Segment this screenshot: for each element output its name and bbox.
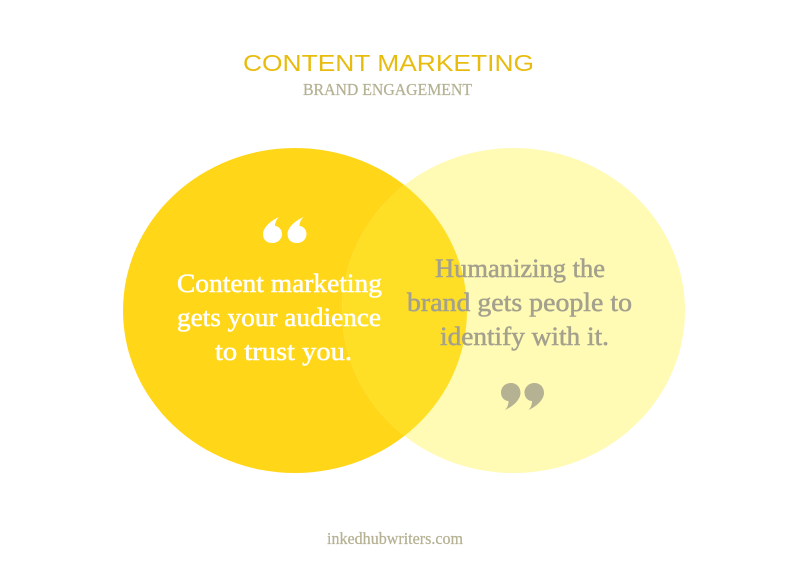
- circle: left: [123, 148, 467, 473]
- icon: opening quotation mark: [263, 217, 306, 243]
- title: CONTENT MARKETING: [243, 50, 534, 76]
- icon: closing quotation mark: [501, 383, 544, 410]
- venn diagram: [123, 148, 685, 473]
- text block: right circle: identify with it.: [440, 322, 609, 351]
- text block: right circle: brand gets people to: [407, 288, 632, 317]
- text block: left circle: to trust you.: [215, 337, 352, 366]
- circle: right: [342, 148, 685, 473]
- subtitle: BRAND ENGAGEMENT: [303, 80, 473, 99]
- overlap region: [342, 185, 467, 436]
- text block: left circle: Content marketing: [177, 269, 382, 298]
- footer website: inkedhubwriters.com: [327, 529, 463, 548]
- text block: left circle: gets your audience: [177, 303, 381, 332]
- infographic canvas: [123, 55, 685, 544]
- text block: right circle: [407, 254, 632, 351]
- text block: right circle: Humanizing the: [435, 254, 605, 283]
- text block: left circle: [177, 269, 382, 366]
